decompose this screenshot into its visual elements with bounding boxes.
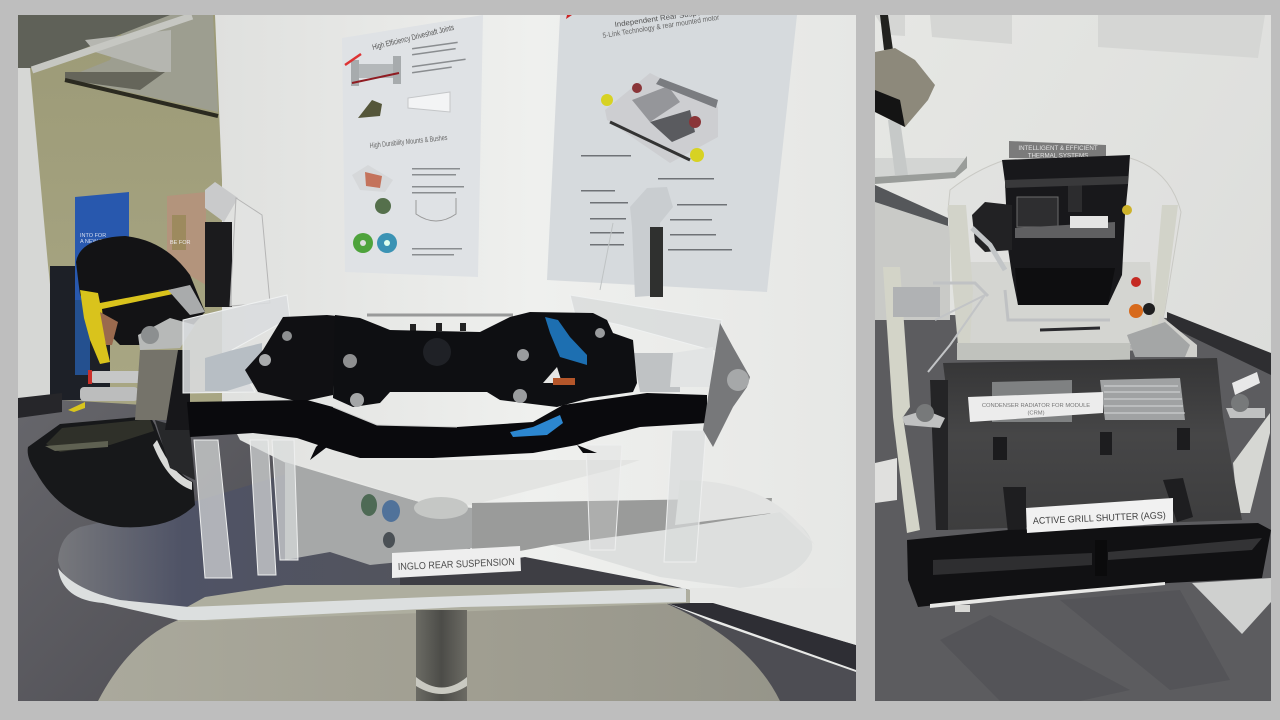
ags label: ACTIVE GRILL SHUTTER (AGS) xyxy=(1033,510,1166,527)
poster: high efficiency driveshaft joints: High Efficiency Driveshaft Joints xyxy=(371,23,455,52)
tyre cutaway upper xyxy=(76,236,205,364)
reflected discs xyxy=(361,494,377,516)
wall through glass xyxy=(414,460,638,505)
background wedge xyxy=(875,200,950,320)
acrylic uprights xyxy=(948,205,1178,345)
bush curve xyxy=(416,198,456,221)
poster: high efficiency driveshaft joints xyxy=(342,15,483,277)
banner: blue xyxy=(75,192,129,375)
poster: independent rear suspension xyxy=(547,5,797,292)
floor streaks xyxy=(940,590,1230,701)
wall posters xyxy=(875,15,1265,58)
upright arm right xyxy=(600,187,673,297)
thermal label: THERMAL SYSTEMS xyxy=(1028,152,1088,160)
banner: blue: A NEW ERA xyxy=(80,239,111,245)
dark floor through glass xyxy=(400,557,690,590)
condenser label: CONDENSER RADIATOR FOR MODULE xyxy=(982,403,1090,409)
reflected band xyxy=(472,498,772,551)
floor glare xyxy=(875,458,897,503)
acrylic mount left xyxy=(183,295,290,393)
clips xyxy=(993,437,1007,460)
ags label xyxy=(1026,498,1173,533)
disc top reflection xyxy=(552,512,812,588)
upper frame xyxy=(333,312,637,407)
body text lines xyxy=(581,155,732,250)
white notch xyxy=(543,367,562,383)
thermal label xyxy=(1009,141,1106,160)
label: Inglo rear suspension: INGLO REAR SUSPENSION xyxy=(398,557,515,573)
banner: second: BE FOR xyxy=(170,240,191,246)
poster: independent rear suspension: Independent Rear Suspension xyxy=(614,5,720,29)
upper wall recess xyxy=(80,15,218,112)
glass surface dark left xyxy=(58,470,470,610)
acrylic mount right xyxy=(570,295,722,392)
rear subframe xyxy=(187,312,750,460)
knuckle and shock tubes xyxy=(68,318,195,430)
wall edge strip xyxy=(875,185,948,226)
tyre cutaway lower xyxy=(28,416,195,527)
floor xyxy=(875,315,1271,701)
condenser xyxy=(992,380,1072,422)
bolts xyxy=(350,393,364,407)
discs xyxy=(353,233,397,253)
floor xyxy=(18,400,300,701)
banner: blue: INTO FOR xyxy=(80,233,106,239)
label: Inglo rear suspension xyxy=(392,546,521,578)
glass reflection grey xyxy=(285,462,472,565)
silver trailing arm xyxy=(205,343,262,391)
driveshaft diagram xyxy=(345,54,401,86)
wall lower right xyxy=(818,634,856,645)
poster: independent rear suspension: 5-Link Technology & rear mounted motor xyxy=(602,13,720,40)
wheel rim xyxy=(168,285,205,315)
pipes and pump xyxy=(893,228,1197,372)
centre post xyxy=(416,610,467,701)
banner: second xyxy=(167,192,206,285)
rod xyxy=(367,314,513,316)
ceiling unit xyxy=(32,16,218,116)
blue highlights xyxy=(510,415,563,437)
panel: rear suspension photo xyxy=(18,5,856,701)
wall xyxy=(875,15,1271,701)
right floor and baseboard xyxy=(660,603,856,701)
left white column xyxy=(18,68,50,398)
base plate xyxy=(98,603,780,701)
HVAC unit xyxy=(972,155,1132,305)
side mounts xyxy=(902,410,945,428)
bottom frame xyxy=(907,523,1271,607)
background stand xyxy=(875,15,967,184)
hub right xyxy=(703,323,750,447)
frame feet xyxy=(310,441,327,460)
showroom wall xyxy=(213,15,856,701)
thermal label: INTELLIGENT & EFFICIENT xyxy=(1018,145,1098,152)
lower acrylic fill xyxy=(952,262,1155,345)
glass front edge xyxy=(58,568,686,620)
olive back wall xyxy=(18,15,222,420)
suspension diagram xyxy=(601,73,718,163)
dark base behind tyre xyxy=(50,266,110,400)
left cluster xyxy=(245,315,337,402)
table top front xyxy=(178,585,690,622)
yellow frame xyxy=(80,289,173,364)
display table xyxy=(58,460,856,701)
shutter body xyxy=(943,358,1242,530)
mounts and bushes heading: High Durability Mounts & Bushes xyxy=(369,133,448,150)
ceiling grid xyxy=(18,15,170,68)
lower rail xyxy=(187,393,707,458)
mount diagram xyxy=(352,165,393,214)
acrylic back panel xyxy=(948,158,1181,350)
disc top xyxy=(675,481,772,525)
panel: thermal systems photo xyxy=(875,15,1271,701)
graph xyxy=(408,92,450,112)
acrylic legs xyxy=(194,430,706,578)
bullet text lines xyxy=(412,42,466,256)
shock absorber rear xyxy=(205,182,270,307)
condenser label: (CRM) xyxy=(1027,410,1045,416)
joint image xyxy=(358,100,382,118)
condenser label xyxy=(968,392,1103,422)
baseboard xyxy=(1167,312,1271,375)
condenser label and shutter xyxy=(902,358,1271,612)
rail highlight xyxy=(333,407,457,427)
